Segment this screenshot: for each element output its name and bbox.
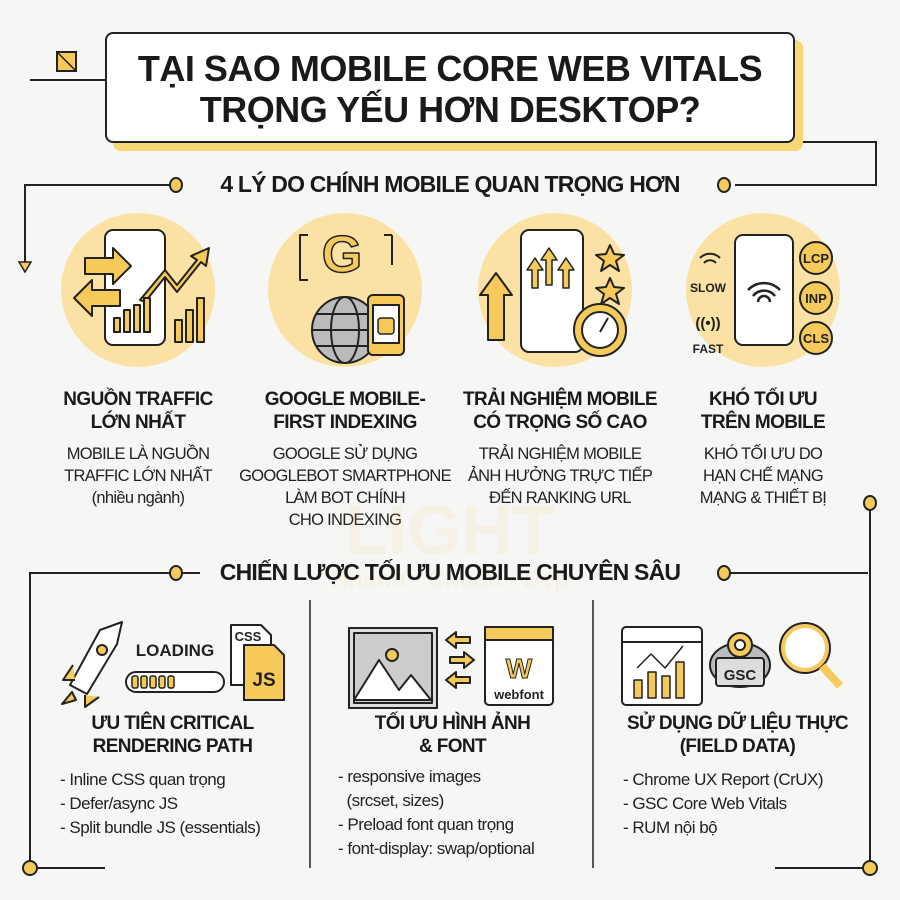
panel: reasons icons: SLOW (690, 281, 727, 295)
panel: reasons icons: G (322, 226, 362, 284)
title: TẠI SAO MOBILE CORE WEB VITALS (138, 48, 762, 89)
text: strategy 2: TỐI ƯU HÌNH ẢNH (375, 713, 530, 734)
watermark: Nhanh - Chuẩn - Đẹp (331, 566, 569, 593)
icons: strategies: GSC (724, 667, 756, 684)
text: strategy 2: & FONT (419, 736, 486, 757)
watermark (331, 491, 569, 593)
text: reason 4: MẠNG & THIẾT BỊ (700, 489, 826, 507)
text: strategy 1: ƯU TIÊN CRITICAL (91, 713, 254, 734)
text: reason 3: ẢNH HƯỞNG TRỰC TIẾP (468, 467, 652, 485)
heading: 4 reasons: 4 LÝ DO CHÍNH MOBILE QUAN TRỌNG HƠN (220, 171, 680, 197)
watermark: LIGHT (345, 491, 555, 569)
heading: strategies: CHIẾN LƯỢC TỐI ƯU MOBILE CHUYÊN SÂU (220, 559, 680, 585)
text: reason 3: CÓ TRỌNG SỐ CAO (473, 412, 647, 433)
text: strategy 2: - Preload font quan trọng (338, 815, 514, 834)
text: strategy 1: - Inline CSS quan trọng (60, 770, 225, 789)
text: strategy 3: - RUM nội bộ (623, 818, 717, 837)
icons: strategies: webfont (493, 687, 545, 702)
text: strategy 3: SỬ DỤNG DỮ LIỆU THỰC (627, 713, 848, 734)
text: strategy 1: - Split bundle JS (essentials) (60, 818, 260, 837)
text: reason 4: KHÓ TỐI ƯU DO (704, 445, 822, 463)
title: TRỌNG YẾU HƠN DESKTOP? (200, 89, 700, 130)
text: reason 1: (nhiều ngành) (92, 489, 184, 507)
text: reason 1: LỚN NHẤT (91, 412, 185, 433)
text: reason 3: ĐẾN RANKING URL (489, 489, 631, 507)
panel: reasons icons: ((•)) (695, 315, 721, 332)
text: strategy 1: - Defer/async JS (60, 794, 178, 813)
text: reason 2: LÀM BOT CHÍNH (285, 489, 405, 507)
text: strategy 3: - GSC Core Web Vitals (623, 794, 787, 813)
text: reason 1: NGUỒN TRAFFIC (63, 389, 213, 410)
text: reason 1: TRAFFIC LỚN NHẤT (64, 467, 212, 485)
text: reason 2: GOOGLE MOBILE- (265, 389, 425, 410)
text: reason 1 (63, 388, 213, 507)
icons: strategies: LOADING (136, 641, 214, 660)
icons: strategies: CSS (235, 629, 262, 644)
panel: reasons icons (61, 213, 840, 367)
text: strategy 2: - font-display: swap/optional (338, 839, 534, 858)
text: reason 4: TRÊN MOBILE (701, 412, 825, 433)
icons: strategies: JS (252, 670, 276, 691)
text: strategy 1 (60, 712, 260, 837)
panel: reasons icons: FAST (693, 342, 724, 356)
text: reason 3: TRẢI NGHIỆM MOBILE (463, 389, 657, 410)
panel: reasons icons: LCP (803, 251, 829, 266)
panel: reasons icons: INP (805, 291, 827, 306)
text: strategy 3 (623, 712, 848, 837)
title (105, 32, 803, 151)
text: strategy 2: (srcset, sizes) (346, 791, 444, 810)
text: reason 2: FIRST INDEXING (273, 412, 417, 433)
text: reason 2: GOOGLE SỬ DỤNG (273, 445, 417, 463)
text: strategy 2: - responsive images (338, 767, 481, 786)
text: reason 3: TRẢI NGHIỆM MOBILE (479, 445, 641, 463)
panel: reasons icons: CLS (803, 331, 829, 346)
text: reason 4: HẠN CHẾ MẠNG (703, 467, 823, 485)
icon: small square (56, 51, 77, 72)
text: strategy 1: RENDERING PATH (93, 736, 252, 757)
text: strategy 2 (338, 712, 534, 858)
text: reason 4 (700, 388, 826, 507)
text: reason 2: CHO INDEXING (289, 511, 401, 529)
text: reason 2 (239, 389, 451, 529)
text: reason 1: MOBILE LÀ NGUỒN (67, 445, 209, 463)
text: strategy 3: - Chrome UX Report (CrUX) (623, 770, 823, 789)
text: reason 4: KHÓ TỐI ƯU (709, 389, 817, 410)
icons: strategies (61, 621, 843, 709)
text: reason 2: GOOGLEBOT SMARTPHONE (239, 467, 451, 485)
text: strategy 3: (FIELD DATA) (680, 736, 795, 757)
icons: strategies: W (506, 653, 533, 684)
text: reason 3 (463, 388, 657, 507)
